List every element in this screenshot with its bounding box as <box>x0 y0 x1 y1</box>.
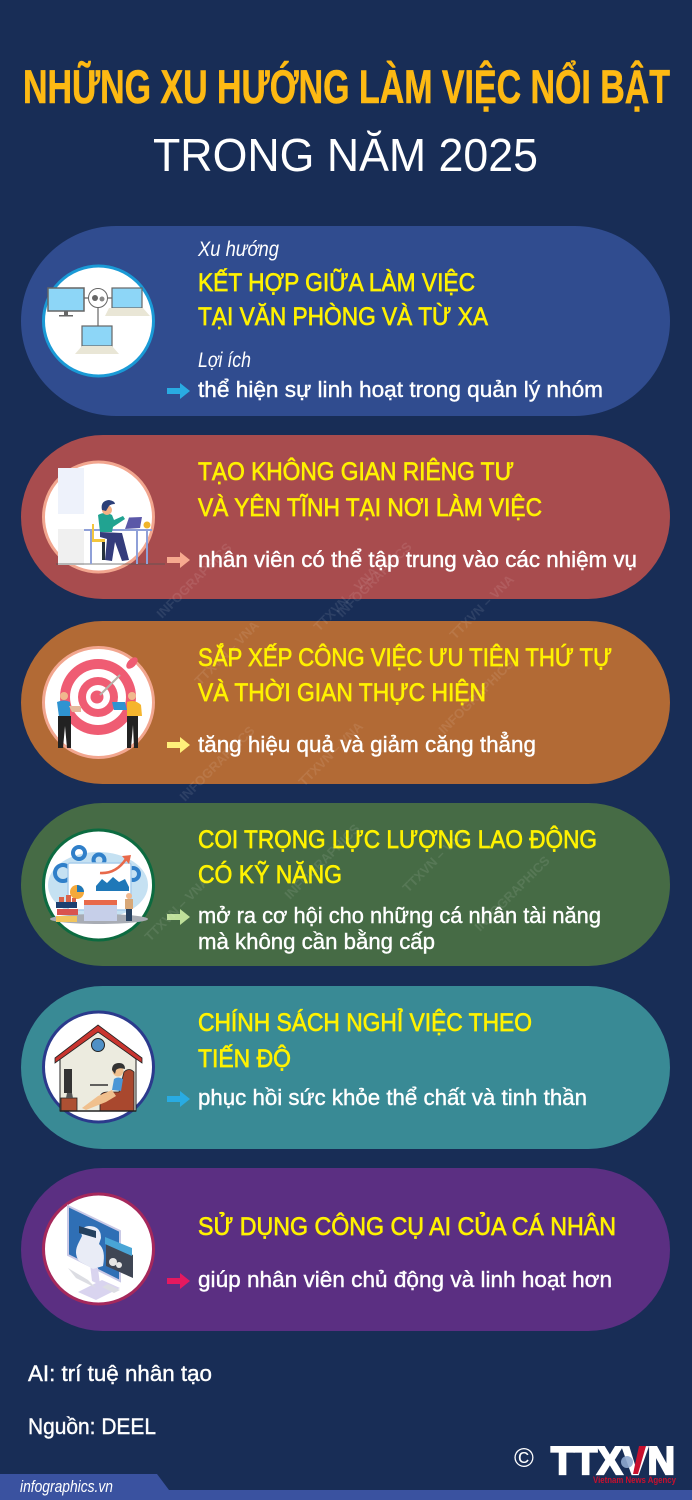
watermarks: TTXVN – VNA <box>447 571 517 642</box>
watermarks: TTXVN – VNA <box>142 873 212 944</box>
benefit text: nhân viên có thể tập trung vào các nhiệm vụ <box>198 547 637 572</box>
icon: networked computers <box>44 266 154 376</box>
title <box>23 60 670 181</box>
panel: hybrid work <box>21 226 670 416</box>
logo: TTXVN: © <box>514 1443 534 1473</box>
heading <box>198 457 542 522</box>
benefit text: mở ra cơ hội cho những cá nhân tài năng <box>198 903 601 928</box>
watermarks <box>142 539 553 944</box>
trend label: Xu hướng <box>197 238 279 261</box>
watermarks: TTXVN – VNA <box>400 824 470 895</box>
heading: TIẾN ĐỘ <box>198 1044 291 1073</box>
heading: VÀ THỜI GIAN THỰC HIỆN <box>198 678 486 707</box>
icon: person at desk <box>44 462 165 572</box>
heading: CÓ KỸ NĂNG <box>198 860 342 889</box>
heading: COI TRỌNG LỰC LƯỢNG LAO ĐỘNG <box>198 825 597 854</box>
heading: VÀ YÊN TĨNH TẠI NƠI LÀM VIỆC <box>198 493 542 522</box>
panel: skilled workforce <box>21 803 670 966</box>
abbreviation note: AI: trí tuệ nhân tạo <box>28 1361 212 1386</box>
heading: TẠO KHÔNG GIAN RIÊNG TƯ <box>198 457 514 486</box>
benefit text <box>198 903 601 954</box>
heading <box>198 268 488 331</box>
watermarks: INFOGRAPHICS <box>436 656 517 737</box>
panel: prioritising tasks <box>21 621 670 784</box>
heading: KẾT HỢP GIỮA LÀM VIỆC <box>198 268 475 297</box>
footer bar: infographics.vn <box>20 1477 113 1496</box>
watermarks: INFOGRAPHICS <box>472 853 553 934</box>
panel: personal AI tools <box>21 1168 670 1331</box>
benefit label: Lợi ích <box>198 349 251 372</box>
heading: TẠI VĂN PHÒNG VÀ TỪ XA <box>198 302 488 331</box>
heading: SỬ DỤNG CÔNG CỤ AI CỦA CÁ NHÂN <box>198 1211 616 1241</box>
benefit text: giúp nhân viên chủ động và linh hoạt hơn <box>198 1267 612 1292</box>
logo: TTXVN: Vietnam News Agency <box>593 1475 676 1485</box>
watermarks: TTXVN – VNA <box>311 563 381 634</box>
benefit text: phục hồi sức khỏe thể chất và tinh thần <box>198 1085 587 1110</box>
heading <box>198 642 612 707</box>
panel: private quiet space <box>21 435 670 599</box>
icon: person resting at home <box>44 1012 154 1122</box>
panel: progress-based leave <box>21 986 670 1149</box>
logo: TTXVN: TTXVN <box>551 1440 675 1483</box>
heading <box>198 825 597 889</box>
arrow <box>167 383 190 399</box>
footer bar <box>0 1474 692 1500</box>
benefit text: thể hiện sự linh hoạt trong quản lý nhóm <box>198 377 603 402</box>
watermarks: TTXVN – VNA <box>296 718 366 789</box>
arrow <box>167 909 190 925</box>
icon: AI robot on monitor <box>44 1194 154 1304</box>
arrow <box>167 737 190 753</box>
watermarks: INFOGRAPHICS <box>282 821 363 902</box>
watermarks: INFOGRAPHICS <box>334 539 415 620</box>
watermarks: INFOGRAPHICS <box>177 723 258 804</box>
source: Nguồn: DEEL <box>28 1414 156 1439</box>
icon: target with two people <box>44 648 154 758</box>
heading: CHÍNH SÁCH NGHỈ VIỆC THEO <box>198 1007 532 1037</box>
benefit text: mà không cần bằng cấp <box>198 929 435 954</box>
arrow <box>167 1273 190 1289</box>
benefit text: tăng hiệu quả và giảm căng thẳng <box>198 732 536 757</box>
heading: SẮP XẾP CÔNG VIỆC ƯU TIÊN THỨ TỰ <box>198 642 612 672</box>
arrow <box>167 1091 190 1107</box>
icon: analytics dashboard <box>44 830 154 940</box>
watermarks: INFOGRAPHICS <box>154 540 235 621</box>
arrow <box>167 552 190 568</box>
heading <box>198 1007 532 1073</box>
watermarks: TTXVN – VNA <box>192 617 262 688</box>
title: TRONG NĂM 2025 <box>153 129 538 181</box>
